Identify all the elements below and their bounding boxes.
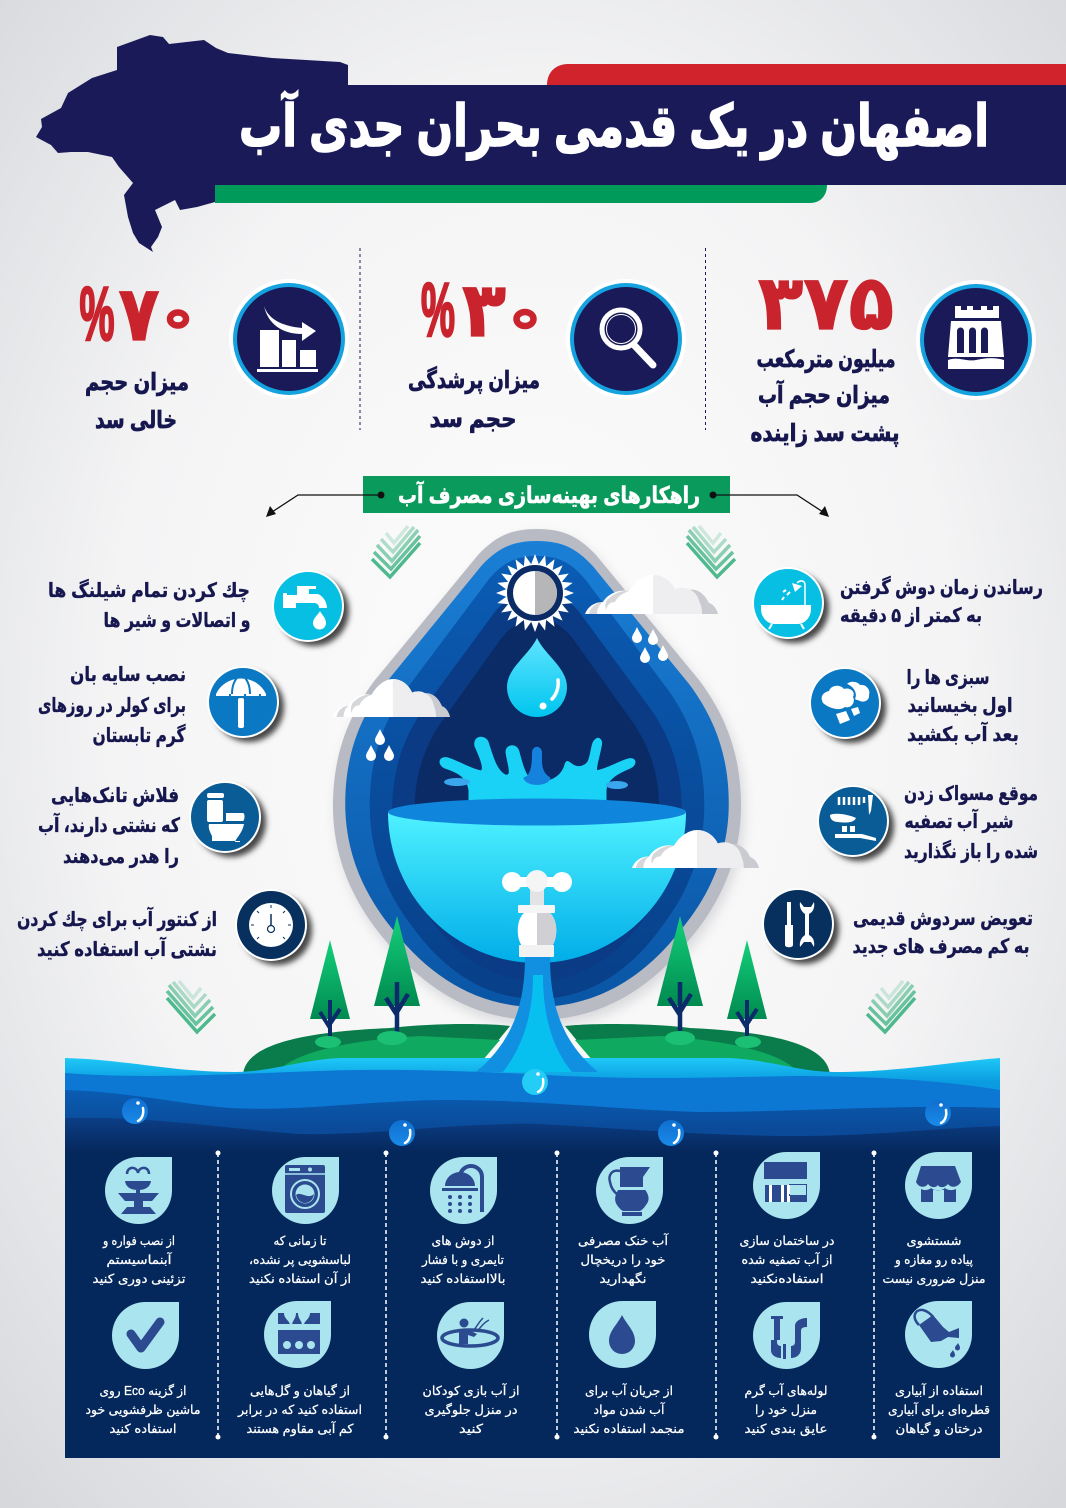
icon: pipes [753, 1302, 820, 1369]
text: از دوش های [432, 1234, 494, 1249]
tip: washing machine [249, 1157, 351, 1287]
text: چك کردن تمام شیلنگ ها [48, 578, 250, 603]
tip: drought resistant plants: کم آبی مقاوم هستند [246, 1421, 354, 1437]
number: ۳۷۵ [758, 261, 894, 346]
icon: washing machine [272, 1157, 339, 1224]
tip: drip irrigation [888, 1301, 990, 1437]
water band and dark panel [65, 957, 1000, 1458]
trees [310, 916, 767, 1048]
paper layers [333, 529, 741, 1020]
stat: fill rate: ۰ [519, 282, 531, 349]
tip: defrosting: آب شدن مواد [594, 1402, 665, 1418]
arrow left [266, 492, 384, 517]
tip: eco mode: استفاده کنید [110, 1422, 176, 1436]
divider dashed lines [360, 248, 706, 430]
text: از کنتور آب برای چك کردن [17, 906, 217, 932]
arrow right [710, 492, 829, 517]
icon: store [905, 1152, 972, 1219]
section heading with arrows [266, 476, 829, 517]
tap [502, 870, 572, 957]
tip: building [740, 1152, 834, 1286]
icon: water meter [235, 889, 312, 965]
icon: dam [916, 280, 1036, 400]
panel dividers [216, 1150, 876, 1440]
solution left 4: meter [17, 889, 312, 965]
text: از گیاهان و گل‌هایی [250, 1383, 350, 1399]
number: % [421, 268, 455, 353]
tip: defrosting: منجمد استفاده نکنید [574, 1422, 684, 1436]
tip: drought resistant plants [237, 1301, 362, 1437]
soft shadow [336, 535, 744, 1026]
icon: faucet [272, 570, 349, 646]
cloud lower right [632, 830, 759, 868]
tip: kids pool [422, 1302, 520, 1436]
number [421, 268, 534, 353]
header banner [36, 35, 1066, 252]
icon: watering can [905, 1301, 972, 1368]
cloud upper right [585, 575, 718, 614]
solution right 3: tooth brushing: شیر آب تصفیه [904, 808, 1014, 833]
solution left 3: toilet: را هدر می‌دهند [63, 846, 179, 868]
tip: fountain: تزئینی دوری کنید [92, 1272, 186, 1287]
heading text: راهکارهای بهینه‌سازی مصرف آب [398, 480, 700, 509]
icon: toilet [189, 781, 266, 857]
text: نصب سایه بان [70, 664, 186, 686]
text: از نصب فواره و [102, 1234, 175, 1249]
tree [374, 916, 420, 1045]
icon: tools [762, 888, 839, 964]
tip: jug: نگهدارید [600, 1271, 646, 1287]
tip: eco mode: ماشین ظرفشویی خود [86, 1403, 200, 1418]
icon: jug [596, 1157, 663, 1224]
cloud left [333, 679, 450, 717]
tip: shower: تایمری و با فشار [421, 1253, 504, 1268]
stat: dam volume: پشت سد زاینده [750, 420, 900, 447]
tree [727, 940, 767, 1048]
icon: shower [430, 1157, 497, 1224]
icon: toothbrush [817, 785, 894, 861]
icon: magnifier [566, 279, 686, 399]
text: لوله‌های آب گرم [744, 1383, 828, 1399]
solution left 1: hoses [48, 570, 349, 646]
green bar [215, 185, 827, 203]
stat: fill rate: حجم سد [430, 406, 516, 433]
icon: vegetables [809, 667, 886, 743]
icon: pool [437, 1302, 504, 1369]
solution right 3: tooth brushing [817, 783, 1038, 863]
label: میزان پرشدگی [408, 366, 540, 394]
label: میزان حجم [85, 369, 189, 396]
tip: fountain: آبنماسیستم [106, 1252, 172, 1268]
text: فلاش تانک‌هایی [51, 785, 179, 807]
solution left 2: shade: برای کولر در روزهای [38, 695, 186, 717]
tip: pipes: عایق بندی کنید [744, 1422, 828, 1437]
number: ۳ [462, 268, 506, 353]
tip: kids pool: در منزل جلوگیری [424, 1402, 518, 1418]
tip: eco mode [86, 1302, 200, 1436]
text: آب خنک مصرفی [578, 1233, 669, 1249]
solution right 1: shower time [752, 567, 1043, 643]
number [80, 272, 186, 357]
tip: shower: بالااستفاده کنید [420, 1272, 506, 1286]
stat: empty volume [80, 272, 349, 434]
water drop [507, 638, 567, 717]
number: % [80, 272, 114, 357]
solution right 4: tools [762, 888, 1033, 964]
icon: rack [264, 1301, 331, 1368]
icon: shop building [753, 1152, 820, 1219]
tip: jug: خود را دریخچال [580, 1253, 666, 1268]
solution left 1: hoses: و اتصالات و شیر ها [104, 610, 250, 632]
bubbles [122, 1069, 951, 1146]
heading ribbon [363, 476, 730, 513]
tree [657, 916, 703, 1045]
tip: pipes [744, 1302, 828, 1437]
bowl [388, 798, 686, 963]
tip: store front [882, 1152, 986, 1287]
tip: pipes: منزل خود را [755, 1403, 817, 1418]
splash [441, 738, 634, 804]
solution left 3: toilet: که نشتی دارند، آب [38, 812, 180, 837]
number: ۷ [118, 272, 160, 357]
water stream [476, 957, 598, 1072]
icon: drop [589, 1301, 656, 1368]
tip: store front: منزل ضروری نیست [882, 1272, 986, 1287]
text: از آب بازی کودکان [422, 1383, 520, 1399]
tip: defrosting [574, 1301, 684, 1436]
tip: washing machine: از آن استفاده نکنید [249, 1271, 351, 1287]
tip: drought resistant plants: استفاده کنید که در برابر [237, 1403, 362, 1418]
icon: fountain [105, 1157, 172, 1224]
solution left 2: shade: گرم تابستان [92, 723, 186, 747]
stat: dam volume [750, 261, 1036, 447]
tip: store front: پیاده رو مغازه و [894, 1253, 973, 1268]
stat: empty volume: خالی سد [95, 407, 177, 434]
tip: drip irrigation: درختان و گیاهان [896, 1421, 982, 1437]
text: سبزی ها را [906, 667, 990, 689]
solution left 3: toilet [38, 781, 266, 868]
solution left 4: meter: نشتی آب استفاده کنید [37, 936, 217, 961]
solution right 2: vegetables: اول بخیسانید [908, 695, 1012, 717]
tip: building: استفاده‌نکنید [750, 1272, 824, 1286]
solution left 2: shade [38, 664, 284, 747]
tree [310, 940, 350, 1048]
icon: falling chart [229, 279, 349, 399]
decorative chevrons [167, 526, 915, 1032]
rain drops right [632, 627, 668, 663]
text: استفاده از آبیاری [895, 1383, 983, 1399]
tip: jug [578, 1157, 669, 1287]
icon: check mark [112, 1302, 179, 1369]
navy banner with province map [36, 35, 1066, 252]
text: در ساختمان سازی [740, 1234, 834, 1249]
stat: dam volume: میزان حجم آب [758, 380, 890, 409]
solution right 2: vegetables: بعد آب بکشید [907, 721, 1019, 746]
label: میلیون مترمکعب [756, 346, 896, 373]
icon: sun [496, 554, 574, 632]
rain drops left [366, 729, 394, 761]
tip: kids pool: کنید [459, 1422, 483, 1436]
red bar [547, 64, 1066, 85]
tip: shower [420, 1157, 506, 1286]
tip: fountain [92, 1157, 186, 1287]
text: از جریان آب برای [585, 1383, 673, 1399]
text: تا زمانی که [274, 1234, 327, 1249]
tip: drip irrigation: قطره‌ای برای آبیاری [888, 1402, 990, 1418]
tip: building: از آب تصفیه شده [742, 1252, 832, 1268]
text: از گزینه Eco روی [100, 1383, 186, 1399]
solution right 2: vegetables [809, 667, 1019, 746]
text: شستشوی [906, 1234, 962, 1249]
landscape hills [243, 1024, 830, 1075]
icon: umbrella [207, 666, 284, 742]
solution right 1: shower time: به کمتر از ۵ دقیقه [840, 605, 982, 627]
tip: washing machine: لباسشویی پر نشده، [249, 1253, 351, 1268]
stat: fill rate [408, 268, 686, 433]
central water drop illustration [333, 529, 759, 1026]
stat: empty volume: ۰ [172, 282, 184, 349]
icon: bathtub [752, 567, 829, 643]
